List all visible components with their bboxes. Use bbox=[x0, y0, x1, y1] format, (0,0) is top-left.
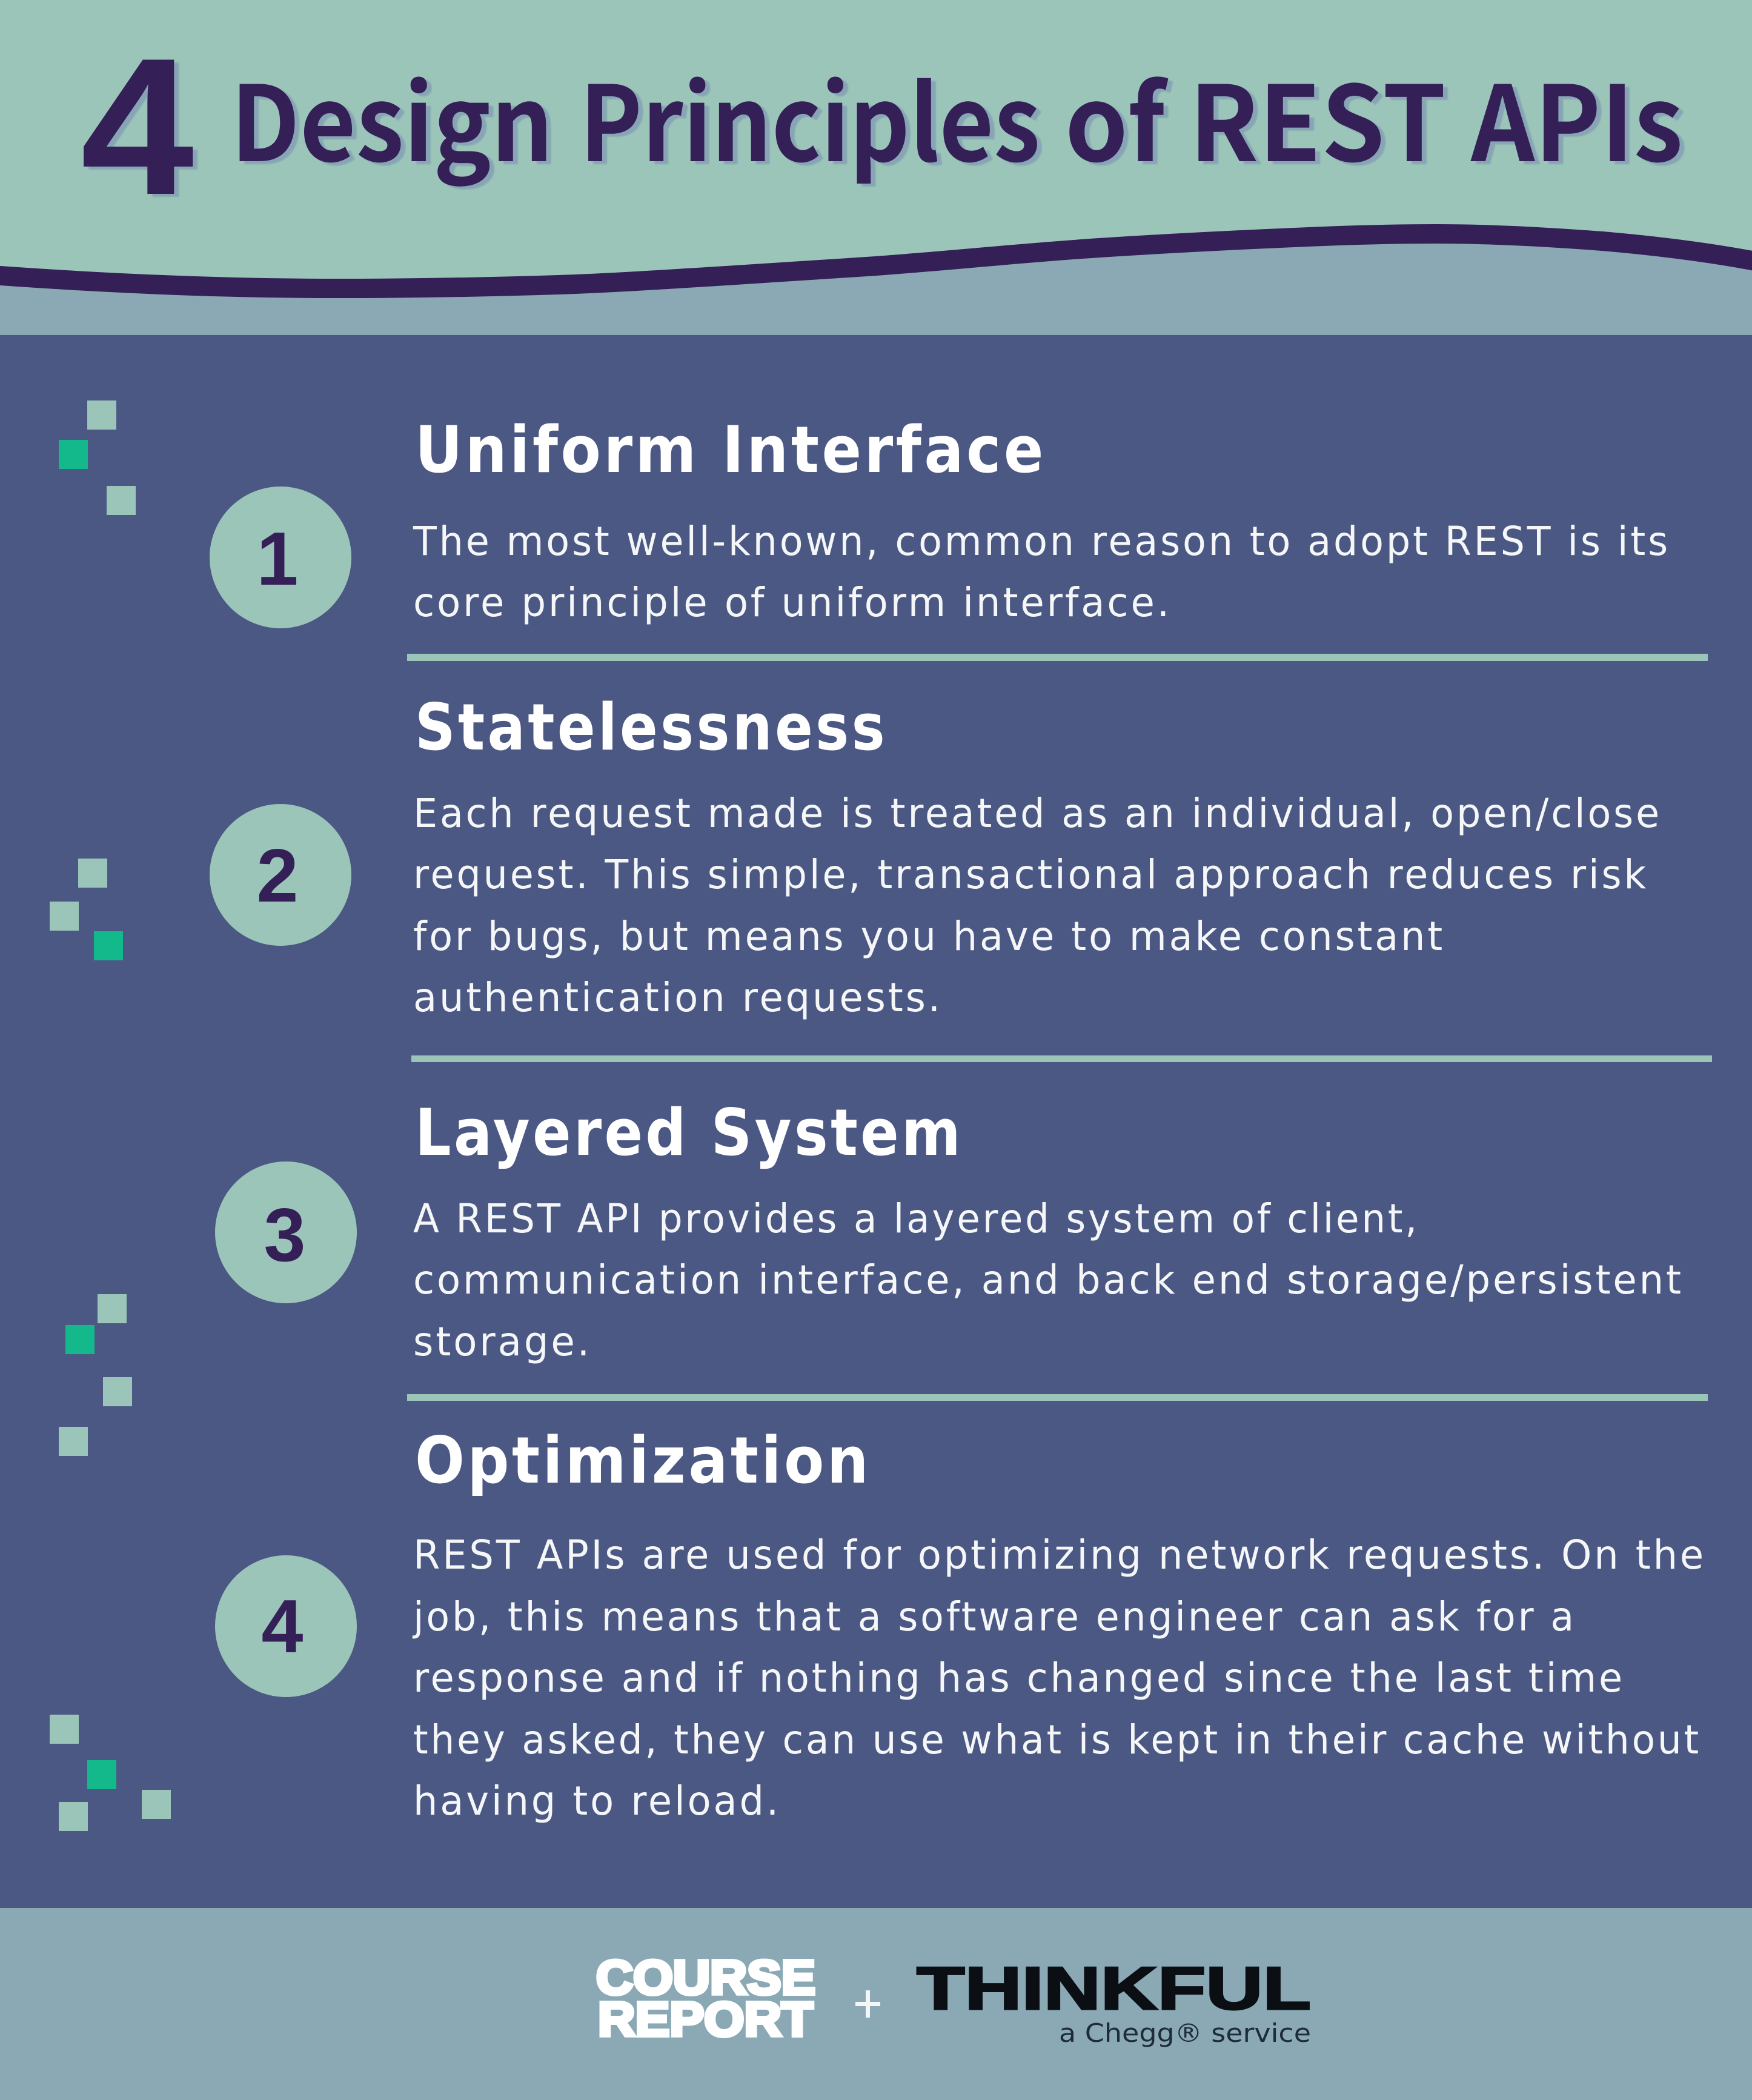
decorative squares: group 3 bbox=[59, 1294, 132, 1456]
logo: Course Report: COURSE bbox=[596, 1950, 815, 2004]
body text 4: response and if nothing has changed since the last time bbox=[413, 1655, 1625, 1701]
title text: Principles bbox=[580, 40, 1040, 191]
number badge 4: 4 bbox=[262, 1585, 304, 1669]
number badge 1: 1 bbox=[257, 517, 298, 601]
body text 3: storage. bbox=[413, 1318, 592, 1365]
plus sign bbox=[855, 1990, 880, 2018]
number badge 2 bbox=[210, 804, 351, 946]
title bbox=[81, 18, 1683, 236]
Chegg tagline: a Chegg® service bbox=[1059, 2018, 1311, 2048]
body text 4: having to reload. bbox=[413, 1778, 781, 1824]
footer background bbox=[0, 1908, 1752, 2100]
body text 4: REST APIs are used for optimizing network requests. On the bbox=[413, 1532, 1706, 1578]
body text 2: authentication requests. bbox=[413, 974, 943, 1021]
body text 2: for bugs, but means you have to make constant bbox=[413, 913, 1445, 960]
logo: Course Report: REPORT bbox=[598, 1992, 813, 2046]
panel: principle 1 bbox=[210, 413, 1670, 628]
panel: principle 3 bbox=[215, 1095, 1684, 1365]
title text: Design bbox=[231, 40, 553, 191]
decorative squares: group 1 bbox=[59, 400, 136, 515]
body text 1: core principle of uniform interface. bbox=[413, 579, 1172, 626]
heading: Layered System: Layered System bbox=[415, 1095, 963, 1170]
header background bbox=[0, 0, 1752, 339]
main panel bbox=[0, 335, 1752, 1908]
panel: principle 4 bbox=[215, 1423, 1706, 1824]
body text 4 bbox=[412, 1532, 1706, 1824]
panel: principle 2 bbox=[210, 690, 1662, 1021]
heading: Statelessness: Statelessness bbox=[415, 690, 888, 765]
number badge 1 bbox=[210, 487, 351, 628]
body text 2: Each request made is treated as an individual, open/close bbox=[413, 790, 1662, 837]
title text: of bbox=[1065, 40, 1169, 191]
decorative squares: group 2 bbox=[50, 859, 123, 960]
body text 4: job, this means that a software engineer can ask for a bbox=[412, 1593, 1576, 1640]
body text 3: A REST API provides a layered system of client, bbox=[413, 1195, 1419, 1242]
footer logos bbox=[596, 1950, 1311, 2048]
title text bbox=[231, 40, 1683, 191]
title text: REST bbox=[1189, 40, 1446, 191]
body text 4: they asked, they can use what is kept in their cache without bbox=[413, 1716, 1701, 1763]
title numeral 4: 4 bbox=[81, 18, 195, 236]
body text 1 bbox=[413, 518, 1670, 626]
number badge 4 bbox=[215, 1555, 357, 1697]
logo: Thinkful bbox=[917, 1955, 1311, 2048]
title text: APIs bbox=[1470, 40, 1683, 191]
number badge 2: 2 bbox=[257, 834, 298, 918]
heading: Optimization: Optimization bbox=[415, 1423, 871, 1498]
decorative squares: group 4 bbox=[50, 1715, 171, 1831]
number badge 3 bbox=[215, 1161, 357, 1303]
heading: Uniform Interface: Uniform Interface bbox=[415, 413, 1046, 487]
body text 3: communication interface, and back end storage/persistent bbox=[413, 1257, 1684, 1303]
logo: Course Report bbox=[596, 1950, 815, 2046]
body text 2 bbox=[413, 790, 1662, 1021]
wave band bbox=[0, 234, 1752, 339]
body text 1: The most well-known, common reason to adopt REST is its bbox=[413, 518, 1670, 565]
logo: Thinkful: THINKFUL bbox=[917, 1955, 1311, 2022]
number badge 3: 3 bbox=[264, 1194, 305, 1277]
body text 2: request. This simple, transactional approach reduces risk bbox=[413, 851, 1648, 898]
body text 3 bbox=[413, 1195, 1684, 1365]
